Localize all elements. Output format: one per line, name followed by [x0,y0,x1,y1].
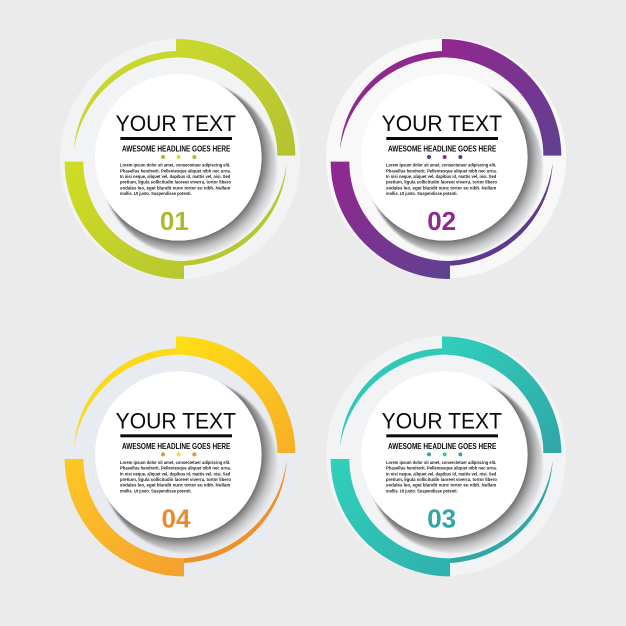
body text: pretium, ligula sollicitudin laoreet viverra, tortor libero [120,477,231,483]
body text: In nisi neque, aliquet vel, dapibus id, mattis vel, nisi. Sed [120,174,230,180]
thick arc bottom left [331,162,450,279]
crescent top left [74,51,176,149]
body text: mollis. Ut justo. Suspendisse potenti. [120,191,192,197]
body text: mollis. Ut justo. Suspendisse potenti. [120,488,192,494]
body text: In nisi neque, aliquet vel, dapibus id, mattis vel, nisi. Sed [386,174,496,180]
thick arc top right [442,336,561,453]
body text: Phasellus hendrerit. Pellentesque aliquet nibh nec urna. [386,168,498,174]
crescent bottom right [450,163,553,266]
body text: mollis. Ut justo. Suspendisse potenti. [386,488,458,494]
title: YOUR TEXT [116,111,236,136]
crescent top left [340,348,442,446]
crescent bottom right [450,461,553,563]
dots [427,452,462,456]
body text: Lorem ipsum dolor sit amet, consectetuer adipiscing elit. [120,460,231,466]
headline: AWESOME HEADLINE GOES HERE [122,442,231,451]
body text: Lorem ipsum dolor sit amet, consectetuer adipiscing elit. [120,163,231,169]
thick arc bottom left [65,459,184,576]
body text [120,163,232,197]
rule [120,434,232,437]
panel: circle 01 [60,39,300,279]
thick arc bottom left [65,162,184,279]
dots [161,155,196,159]
dots [161,452,196,456]
body text: sodales leo, eget blandit nunc tortor eu nibh. Nullam [120,483,231,489]
headline: AWESOME HEADLINE GOES HERE [388,442,497,451]
crescent bottom right [184,163,287,266]
body text: sodales leo, eget blandit nunc tortor eu nibh. Nullam [120,185,231,191]
dots [427,155,462,159]
body text: Phasellus hendrerit. Pellentesque aliquet nibh nec urna. [386,466,498,472]
body text: Phasellus hendrerit. Pellentesque aliquet nibh nec urna. [120,466,232,472]
rule [386,137,498,140]
drop shadow [368,378,543,553]
panel: circle 04 [60,336,300,576]
number: 03 [427,503,456,533]
drop shadow [368,81,543,256]
body text [386,460,498,494]
white disc [361,371,528,538]
crescent top left [74,348,176,446]
drop shadow [102,81,277,256]
title: YOUR TEXT [382,111,502,136]
white disc [95,74,262,241]
pale base disc [60,336,300,576]
headline: AWESOME HEADLINE GOES HERE [122,145,231,154]
title: YOUR TEXT [116,408,236,433]
panel: circle 03 [326,336,566,576]
rule [386,434,498,437]
body text: Phasellus hendrerit. Pellentesque aliquet nibh nec urna. [120,168,232,174]
number: 04 [162,503,191,533]
crescent top left [340,51,442,149]
body text: In nisi neque, aliquet vel, dapibus id, mattis vel, nisi. Sed [120,471,230,477]
thick arc bottom left [331,459,450,576]
body text: pretium, ligula sollicitudin laoreet viverra, tortor libero [120,180,231,186]
headline: AWESOME HEADLINE GOES HERE [388,145,497,154]
body text: sodales leo, eget blandit nunc tortor eu nibh. Nullam [386,185,497,191]
thick arc top right [176,336,295,453]
rule [120,137,232,140]
number: 01 [160,206,189,236]
body text: In nisi neque, aliquet vel, dapibus id, mattis vel, nisi. Sed [386,471,496,477]
white disc [95,371,262,538]
body text: pretium, ligula sollicitudin laoreet viverra, tortor libero [386,477,497,483]
pale base disc [326,336,566,576]
body text: pretium, ligula sollicitudin laoreet viverra, tortor libero [386,180,497,186]
white disc [361,74,528,241]
pale base disc [326,38,566,278]
body text: Lorem ipsum dolor sit amet, consectetuer adipiscing elit. [386,163,497,169]
body text: mollis. Ut justo. Suspendisse potenti. [386,191,458,197]
pale base disc [60,39,300,279]
body text: Lorem ipsum dolor sit amet, consectetuer adipiscing elit. [386,460,497,466]
thick arc top right [176,39,295,156]
body text [386,163,498,197]
body text [120,460,232,494]
panel: circle 02 [326,38,566,279]
number: 02 [427,206,456,236]
crescent bottom right [184,461,287,563]
title: YOUR TEXT [382,408,502,433]
thick arc top right [442,39,561,156]
drop shadow [102,378,277,553]
body text: sodales leo, eget blandit nunc tortor eu nibh. Nullam [386,483,497,489]
